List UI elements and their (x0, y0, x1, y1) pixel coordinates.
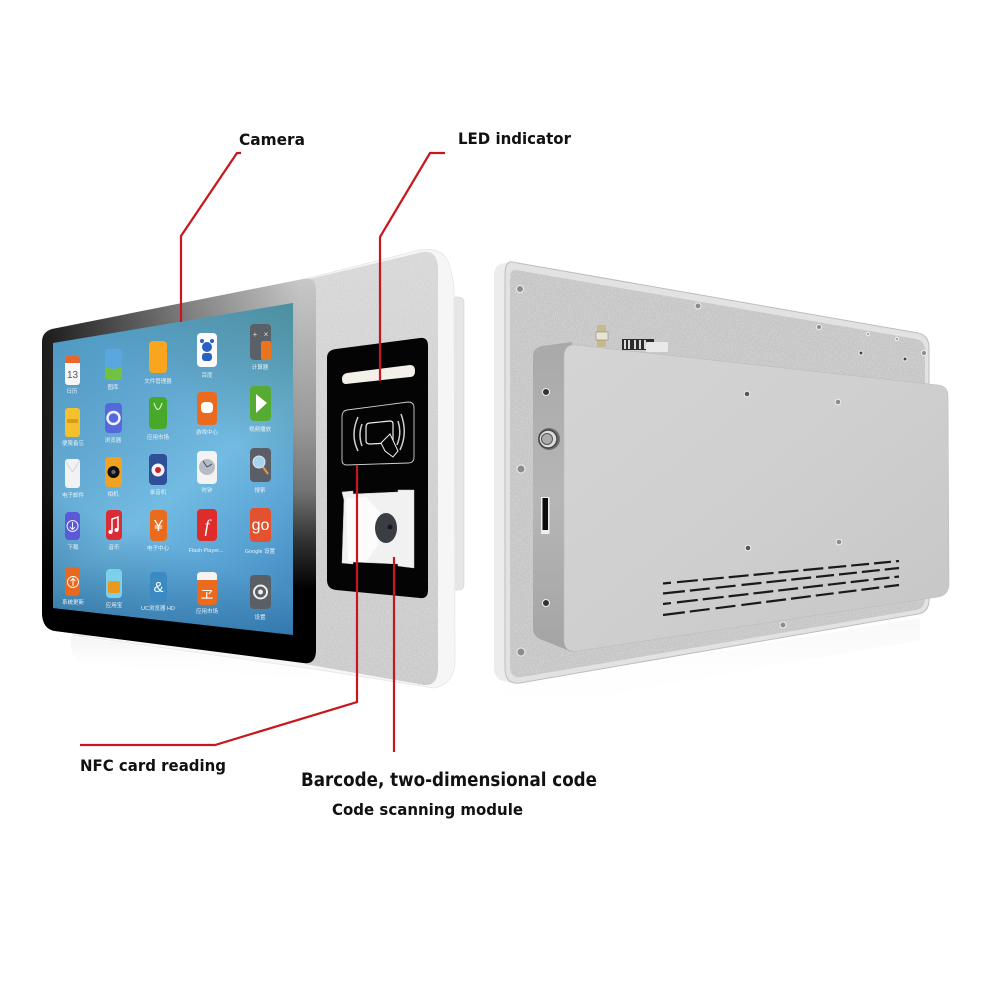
icon: gallery (105, 349, 122, 391)
icon: app store (106, 569, 123, 609)
icon: payment center: ¥ (153, 518, 163, 535)
icon: calculator (250, 324, 271, 371)
label: barcode heading: Barcode, two-dimensional code (301, 770, 597, 791)
icon: app market (147, 397, 169, 441)
silver front panel (305, 252, 438, 685)
icon: uc browser (141, 572, 175, 612)
label: NFC card reading: NFC card reading (80, 756, 226, 775)
icon: app market: 应用市场 (147, 433, 169, 441)
icon: flash player (189, 509, 224, 554)
icon: mail (62, 459, 84, 499)
rear plate (505, 262, 929, 683)
icon: store: ヱ (200, 587, 214, 602)
icon: game center (196, 392, 218, 436)
icon: notes: 便笺备忘 (62, 439, 84, 447)
icon: google settings: go (252, 517, 270, 534)
icon: store: 应用市场 (196, 607, 218, 615)
display screen (53, 303, 293, 635)
icon: video player (249, 386, 271, 433)
icon: camera (105, 457, 122, 498)
black module panel (327, 338, 428, 598)
mounting screws (516, 286, 926, 656)
icon: system update: 系统更新 (62, 598, 84, 606)
icon: flash player: Flash Player... (189, 548, 224, 554)
callout line: barcode (393, 557, 395, 752)
icon: system update (62, 567, 84, 606)
label: LED indicator: LED indicator (458, 129, 571, 148)
icon: google settings: Google 设置 (245, 547, 276, 555)
power button (538, 428, 560, 450)
icon: settings (250, 575, 271, 621)
icon: search: 搜索 (254, 486, 266, 494)
icon: calculator: + (253, 330, 258, 339)
icon: browser: 浏览器 (105, 436, 122, 444)
icon: payment center (147, 510, 169, 552)
icon: recorder: 录音机 (150, 488, 167, 496)
icon: uc browser: UC浏览器 HD (141, 604, 175, 612)
icon: app store: 应用宝 (106, 601, 123, 609)
callout line: camera (181, 153, 241, 322)
icon: file manager (144, 341, 172, 385)
icon: download: 下载 (67, 543, 79, 551)
icon: game center: 游戏中心 (196, 428, 218, 436)
icon: browser (105, 403, 122, 444)
icon: calculator: 计算器 (252, 363, 269, 371)
white outer frame (72, 249, 455, 688)
display bezel (42, 278, 316, 663)
ventilation slots (663, 561, 899, 615)
icon: video player: 视频播放 (249, 425, 271, 433)
icon: file manager: 文件管理器 (144, 377, 172, 385)
icon: calendar: 日历 (66, 388, 78, 395)
icon: music (106, 510, 122, 551)
white side edge (494, 262, 512, 683)
icon: flash player: f (204, 516, 212, 536)
label: code scanning module: Code scanning module (332, 800, 523, 819)
NFC reader icon (342, 402, 414, 465)
icon: clock: 时钟 (201, 486, 213, 494)
icon: payment center: 电子中心 (147, 544, 169, 552)
reflection under rear device (505, 618, 920, 712)
callout line: LED indicator (380, 153, 445, 381)
icon: calendar (65, 356, 80, 395)
barcode scanner window (342, 490, 414, 568)
icon: camera: 相机 (107, 490, 119, 498)
icon: mail: 电子邮件 (62, 491, 84, 499)
lens glint (388, 524, 392, 530)
icon: search (250, 448, 271, 494)
LED indicator bar (342, 365, 415, 384)
scanner lens (375, 513, 397, 543)
computing box cover (564, 345, 949, 651)
rear view device (494, 262, 949, 712)
icon: notes (62, 408, 84, 447)
icon: calendar: 13 (67, 370, 78, 381)
icon: gallery: 图库 (107, 383, 119, 391)
side ports (622, 339, 668, 352)
callout line: NFC (80, 465, 357, 745)
icon: download (65, 512, 80, 551)
icon: baidu (197, 333, 217, 379)
label: camera: Camera (239, 130, 305, 149)
icon: calculator: × (264, 330, 269, 339)
icon: clock (197, 451, 217, 494)
computing box side (533, 342, 572, 652)
front view device (42, 249, 464, 688)
reflection under front device (71, 636, 320, 680)
card slot (541, 497, 550, 534)
app icon grid (62, 324, 276, 621)
icon: music: 音乐 (108, 543, 120, 551)
icon: uc browser: & (153, 579, 164, 596)
icon: settings: 设置 (254, 613, 266, 621)
rear mounting block edge (450, 297, 464, 590)
icon: store (196, 572, 218, 615)
icon: google settings (245, 508, 276, 555)
antenna connector (596, 325, 608, 347)
icon: recorder (149, 454, 167, 496)
icon: baidu: 百度 (201, 371, 213, 379)
rear plate face (510, 270, 925, 677)
